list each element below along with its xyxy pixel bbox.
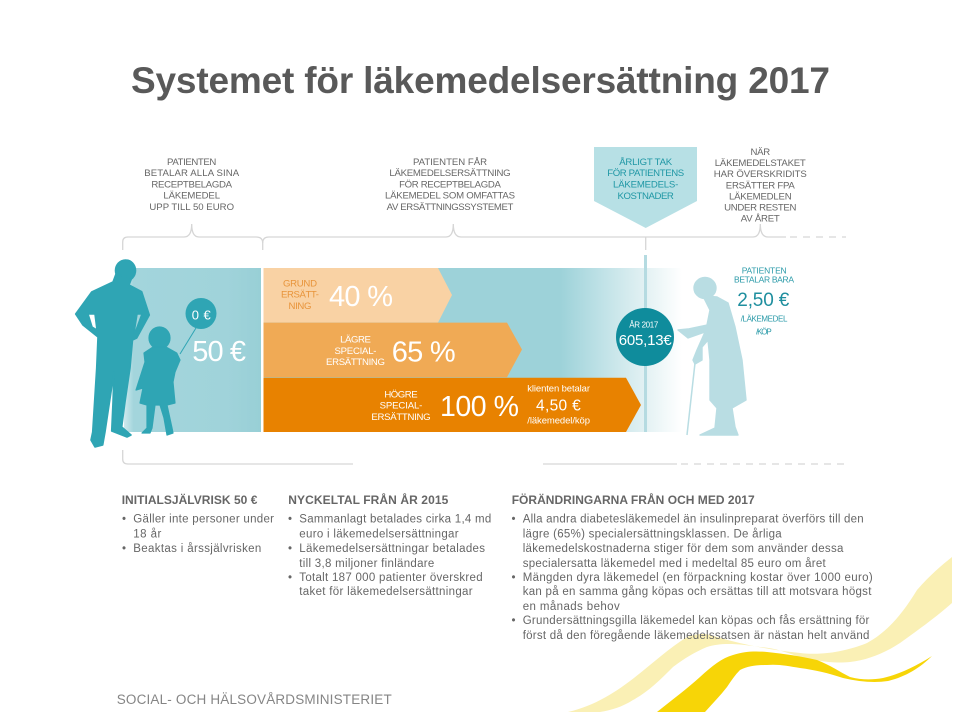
circle: annual ceiling amount: ÅR 2017: [629, 321, 659, 330]
text block: patient receives reimbursement: LÄKEMEDELSERSÄTTNING: [389, 168, 511, 179]
text column: changes from 2017: •: [512, 572, 516, 584]
decorative yellow wave: dark band: [657, 651, 932, 712]
text column: changes from 2017: läkemedelskostnaderna stiger för dem som använder dessa: [523, 543, 844, 555]
callout: annual ceiling pentagon: LÄKEMEDELS-: [613, 179, 678, 190]
bottom bracket: [123, 450, 846, 464]
bar: basic reimbursement 40%: 40 %: [329, 281, 393, 313]
text block: patient pays only 2.50: PATIENTEN: [742, 265, 787, 275]
text block: patient pays all up to 50 euro: PATIENTEN: [167, 157, 216, 168]
text column: changes from 2017: •: [512, 615, 516, 627]
bar: basic reimbursement 40%: GRUND: [283, 278, 317, 290]
text block: when ceiling is exceeded: HAR ÖVERSKRIDITS: [714, 169, 807, 180]
balloon with 0 euro: 0 €: [192, 307, 211, 322]
text column: key figures 2015: Läkemedelsersättningar betalades: [299, 543, 485, 555]
text column: changes from 2017: först då den föregående läkemedelssatsen är nästan helt använd: [523, 630, 869, 642]
text column: changes from 2017: [512, 492, 873, 642]
callout: annual ceiling pentagon: KOSTNADER: [618, 191, 674, 202]
bar: lower special reimbursement 65%: 65 %: [392, 337, 456, 369]
text column: key figures 2015: NYCKELTAL FRÅN ÅR 2015: [288, 492, 449, 507]
text column: changes from 2017: kan på en samma gång köpas och ersättas till att motsvara högst: [523, 586, 872, 598]
text column: key figures 2015: Totalt 187 000 patienter överskred: [299, 572, 483, 584]
text block: when ceiling is exceeded: LÄKEMEDLEN: [729, 191, 792, 202]
footer: ministry name: SOCIAL- OCH HÄLSOVÅRDSMINISTERIET: [117, 692, 392, 707]
label: 50 euro: 50 €: [192, 336, 246, 368]
text block: patient pays only 2.50: BETALAR BARA: [734, 275, 794, 285]
text block: patient pays all up to 50 euro: BETALAR ALLA SINA: [144, 168, 240, 179]
text block: when ceiling is exceeded: [714, 147, 807, 224]
text block: patient pays all up to 50 euro: UPP TILL 50 EURO: [149, 202, 234, 213]
text column: key figures 2015: taket för läkemedelsersättningar: [299, 586, 473, 598]
text column: changes from 2017: •: [512, 514, 516, 526]
text block: patient pays all up to 50 euro: RECEPTBELAGDA: [151, 179, 233, 190]
text column: key figures 2015: •: [288, 572, 292, 584]
text column: initial deductible: 18 år: [133, 528, 161, 540]
text column: initial deductible: Gäller inte personer under: [133, 514, 274, 526]
text block: when ceiling is exceeded: UNDER RESTEN: [724, 202, 797, 213]
bar: higher special reimbursement 100%: 4,50 €: [536, 398, 581, 415]
text block: patient pays only 2.50: /LÄKEMEDEL: [741, 315, 788, 324]
text column: key figures 2015: •: [288, 543, 292, 555]
icon: child silhouette: [136, 327, 180, 435]
text block: patient receives reimbursement: [385, 157, 515, 213]
decorative yellow wave: light band: [568, 557, 952, 712]
text column: initial deductible: •: [122, 543, 126, 555]
bar: higher special reimbursement 100%: klienten betalar: [527, 384, 590, 395]
text block: patient receives reimbursement: PATIENTEN FÅR: [413, 157, 487, 168]
callout: annual ceiling pentagon: [594, 147, 697, 228]
top brackets: [123, 224, 846, 250]
text column: changes from 2017: lägre (65%) specialersättningsklassen. De årliga: [523, 528, 782, 540]
text block: patient pays only 2.50: 2,50 €: [737, 290, 790, 311]
text block: when ceiling is exceeded: NÄR: [750, 147, 770, 158]
text column: changes from 2017: FÖRÄNDRINGARNA FRÅN OCH MED 2017: [512, 492, 755, 507]
circle: annual ceiling amount: 605,13€: [619, 332, 672, 349]
icon: man silhouette: [76, 260, 149, 447]
text block: when ceiling is exceeded: ERSÄTTER FPA: [726, 180, 795, 191]
text column: initial deductible: Beaktas i årssjälvrisken: [133, 543, 261, 555]
bar: basic reimbursement 40%: NING: [288, 301, 312, 312]
title: Systemet för läkemedelsersättning 2017: [131, 60, 830, 101]
bar: higher special reimbursement 100%: SPECIAL-: [380, 400, 422, 412]
text column: changes from 2017: en månads behov: [523, 601, 620, 613]
text column: key figures 2015: [288, 492, 491, 598]
bar: lower special reimbursement 65%: SPECIAL-: [334, 346, 376, 357]
text block: patient receives reimbursement: FÖR RECEPTBELAGDA: [399, 179, 501, 190]
bar: higher special reimbursement 100%: 100 %: [440, 391, 519, 423]
text block: patient receives reimbursement: LÄKEMEDEL SOM OMFATTAS: [385, 190, 515, 202]
text block: patient pays only 2.50: [734, 265, 794, 337]
callout: annual ceiling pentagon: ÅRLIGT TAK: [619, 157, 673, 168]
icon: elderly woman silhouette: [678, 278, 746, 435]
text column: changes from 2017: specialersatta läkemedel med i medeltal 85 euro om året: [523, 558, 826, 570]
circle: annual ceiling amount: [616, 308, 674, 366]
bar: higher special reimbursement 100%: HÖGRE: [384, 390, 418, 400]
text block: when ceiling is exceeded: AV ÅRET: [741, 213, 780, 224]
text block: patient pays all up to 50 euro: [144, 157, 240, 213]
text block: patient pays all up to 50 euro: LÄKEMEDEL: [163, 190, 221, 202]
text block: when ceiling is exceeded: LÄKEMEDELSTAKET: [715, 158, 806, 169]
text column: changes from 2017: Mängden dyra läkemedel (en förpackning kostar över 1000 euro): [523, 572, 873, 584]
text column: key figures 2015: euro i läkemedelsersättningar: [299, 528, 459, 540]
bar: higher special reimbursement 100%: /läkemedel/köp: [527, 415, 590, 426]
bar: basic reimbursement 40%: [264, 268, 452, 323]
bar: higher special reimbursement 100%: [264, 378, 641, 432]
bar: lower special reimbursement 65%: [264, 323, 522, 377]
text column: key figures 2015: •: [288, 514, 292, 526]
text column: key figures 2015: Sammanlagt betalades cirka 1,4 md: [299, 514, 491, 526]
text column: changes from 2017: Grundersättningsgilla läkemedel kan köpas och fås ersättning för: [523, 615, 870, 627]
bar: basic reimbursement 40%: ERSÄTT-: [281, 290, 319, 300]
bar: lower special reimbursement 65%: ERSÄTTNING: [326, 357, 385, 368]
text column: initial deductible: [122, 492, 274, 555]
panel: initial deductible area: [124, 268, 261, 432]
text column: key figures 2015: till 3,8 miljoner finländare: [299, 558, 434, 570]
callout: annual ceiling pentagon: FÖR PATIENTENS: [607, 168, 684, 179]
bar: higher special reimbursement 100%: ERSÄTTNING: [371, 412, 431, 423]
text column: initial deductible: •: [122, 514, 126, 526]
text column: initial deductible: INITIALSJÄLVRISK 50 €: [122, 492, 258, 507]
annual ceiling vertical line: [644, 255, 647, 432]
bar: lower special reimbursement 65%: LÄGRE: [340, 334, 371, 346]
text column: changes from 2017: Alla andra diabetesläkemedel än insulinpreparat överförs till den: [523, 514, 864, 526]
panel: reimbursement area fading out: [264, 268, 682, 432]
balloon with 0 euro: [180, 298, 216, 354]
text block: patient receives reimbursement: AV ERSÄTTNINGSSYSTEMET: [387, 202, 513, 213]
text block: patient pays only 2.50: /KÖP: [756, 328, 772, 337]
